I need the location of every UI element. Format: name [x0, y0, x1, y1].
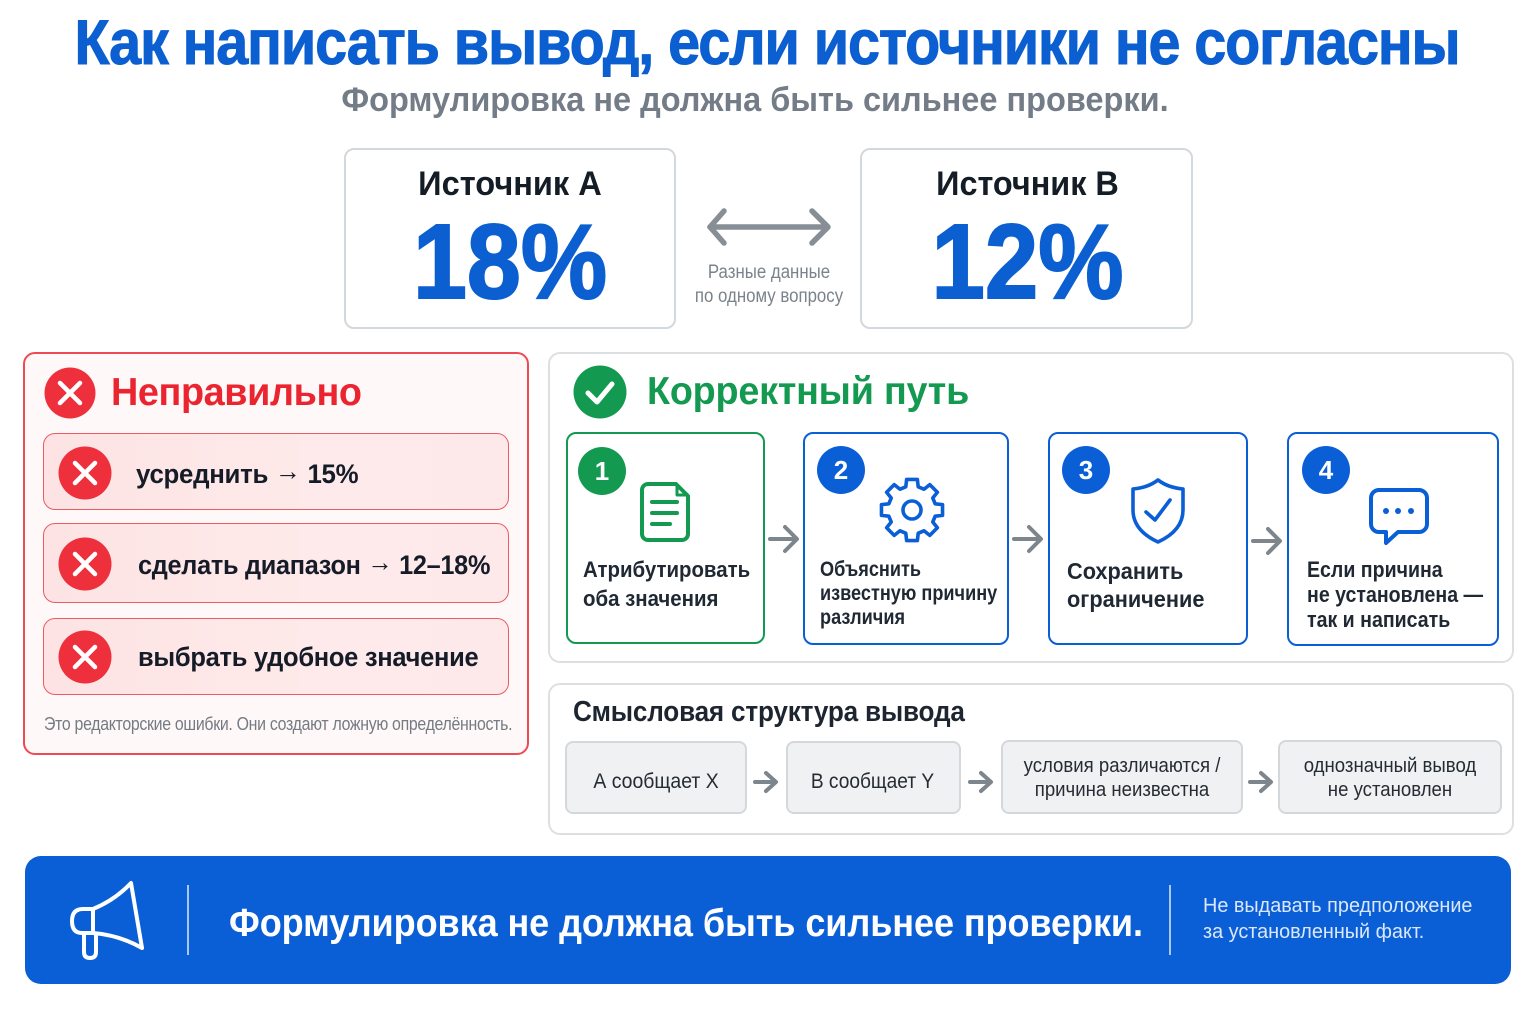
icon: cross — [58, 446, 112, 500]
comparison caption: по одному вопросу — [695, 286, 843, 307]
wrong item 3 — [43, 618, 509, 695]
source B label: Источник В — [936, 165, 1119, 203]
source A value: 18% — [413, 203, 607, 321]
box 4 text: однозначный вывод — [1304, 755, 1476, 777]
structure box 4 — [1278, 740, 1502, 814]
step 4 — [1287, 432, 1499, 646]
box 4 text — [1304, 755, 1476, 801]
step 1 number: 1 — [595, 456, 609, 486]
step 2 text: известную причину — [820, 581, 997, 605]
step 2 text: Объяснить — [820, 557, 921, 581]
arrow s3 — [1248, 770, 1274, 794]
step 2 text — [820, 557, 998, 629]
icon: cross — [58, 630, 112, 684]
step 1 number — [578, 447, 626, 495]
box 3 text — [1024, 755, 1220, 801]
step 2 — [803, 432, 1009, 645]
panel: meaning structure — [548, 683, 1514, 835]
panel: source B — [860, 148, 1193, 329]
step 2 text: различия — [820, 605, 905, 629]
box 2 text: В сообщает Y — [811, 770, 934, 793]
step 4 text: так и написать — [1307, 607, 1450, 632]
panel: correct path — [548, 352, 1514, 663]
arrow s1 — [753, 770, 778, 794]
step 1 — [566, 432, 765, 644]
step 4 number: 4 — [1319, 455, 1333, 485]
banner side text: Не выдавать предположение — [1203, 894, 1472, 917]
wrong item 2 — [43, 523, 509, 603]
step 1 text — [583, 557, 750, 611]
wrong heading: Неправильно — [111, 371, 362, 414]
comparison caption: Разные данные — [708, 262, 830, 283]
step 3 text: Сохранить — [1067, 558, 1183, 584]
icon: document — [640, 482, 690, 542]
icon: correct check — [574, 366, 626, 418]
source A label: Источник А — [418, 165, 602, 203]
icon: speech bubble — [1369, 488, 1429, 546]
step 3 text: ограничение — [1067, 586, 1204, 612]
panel: wrong — [23, 352, 529, 755]
banner main text: Формулировка не должна быть сильнее проверки. — [229, 902, 1143, 945]
step 2 number — [817, 446, 865, 494]
text: усреднить → 15% — [136, 456, 358, 489]
text: выбрать удобное значение — [138, 642, 478, 672]
correct heading: Корректный путь — [647, 370, 969, 413]
box 1 text: А сообщает Х — [593, 770, 719, 793]
divider left — [187, 885, 189, 955]
icon: shield — [1131, 478, 1185, 544]
structure box 1 — [565, 741, 747, 814]
step 4 text — [1307, 557, 1484, 632]
icon: cross — [58, 538, 112, 590]
comparison caption — [695, 262, 844, 307]
divider right — [1169, 885, 1171, 955]
structure heading: Смысловая структура вывода — [573, 696, 965, 728]
box 3 text: условия различаются / — [1024, 755, 1220, 777]
structure box 3 — [1001, 740, 1243, 814]
wrong note: Это редакторские ошибки. Они создают ложную определённость. — [44, 713, 512, 734]
arrow 1 — [768, 524, 800, 554]
icon: wrong header — [44, 368, 96, 418]
source B value: 12% — [931, 203, 1124, 321]
structure box 2 — [786, 741, 961, 814]
subtitle: Формулировка не должна быть сильнее проверки. — [341, 81, 1169, 119]
step 4 number — [1302, 446, 1350, 494]
step 3 — [1048, 432, 1248, 645]
banner side text: за установленный факт. — [1203, 920, 1424, 943]
arrow s2 — [968, 770, 994, 794]
icon: gear — [880, 478, 944, 542]
arrow 2 — [1012, 524, 1044, 554]
step 4 text: Если причина — [1307, 557, 1443, 582]
wrong item 1 — [43, 433, 509, 510]
step 4 text: не установлена — — [1307, 582, 1483, 607]
panel: source A — [344, 148, 676, 329]
box 3 text: причина неизвестна — [1035, 779, 1209, 801]
box 4 text: не установлен — [1328, 779, 1452, 801]
step 1 text: Атрибутировать — [583, 557, 750, 582]
banner — [25, 856, 1511, 984]
step 2 number: 2 — [834, 455, 848, 485]
step 3 number: 3 — [1079, 455, 1093, 485]
step 1 text: оба значения — [583, 586, 718, 611]
icon: megaphone — [70, 880, 144, 960]
step 3 number — [1062, 446, 1110, 494]
banner side text — [1203, 894, 1472, 943]
arrow 3 — [1251, 526, 1282, 556]
step 3 text — [1067, 558, 1204, 612]
title: Как написать вывод, если источники не согласны — [74, 8, 1460, 78]
text: сделать диапазон → 12–18% — [138, 547, 490, 580]
arrow: double-headed comparison — [707, 208, 831, 246]
